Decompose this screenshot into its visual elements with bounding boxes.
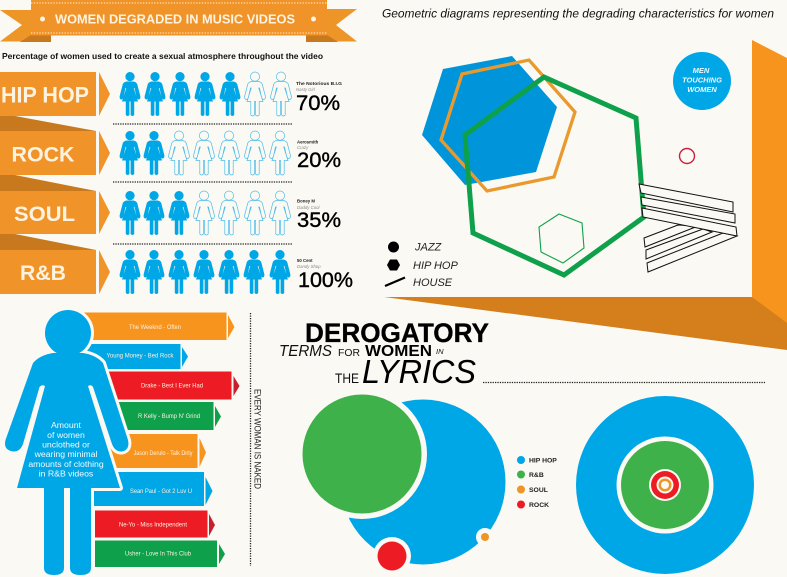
banner: sean paul bbox=[85, 472, 212, 506]
label: hip hop bbox=[0, 72, 110, 116]
banner: the weeknd bbox=[83, 312, 234, 340]
stat: hip hop 70% bbox=[296, 81, 343, 115]
heading: banner title: WOMEN DEGRADED IN MUSIC VIDEOS bbox=[55, 12, 295, 26]
heading: derogatory terms for women in the lyrics: LYRICS bbox=[362, 353, 476, 390]
label: r&b: R&B bbox=[20, 262, 66, 285]
diagram: geometric hexagons bbox=[422, 56, 737, 275]
heading: derogatory terms for women in the lyrics: THE bbox=[335, 371, 359, 386]
stat: soul 35%: Boney M bbox=[297, 198, 315, 204]
heading: derogatory terms for women in the lyrics: IN bbox=[436, 347, 444, 356]
banner: r kelly: R Kelly - Bump N' Grind bbox=[138, 414, 200, 420]
banner: the weeknd: The Weeknd - Often bbox=[129, 325, 181, 331]
panel: genre arrows bbox=[0, 72, 110, 294]
stat: soul 35% bbox=[297, 198, 341, 232]
stat: soul 35%: Daddy Cool bbox=[297, 205, 320, 210]
banner: jason derulo: Jason Derulo - Talk Dirty bbox=[134, 451, 192, 457]
legend: genres bbox=[517, 456, 557, 509]
banner: young money: Young Money - Bed Rock bbox=[106, 354, 174, 360]
shape: small red circle bbox=[680, 148, 694, 164]
label: every woman is naked: EVERY WOMAN IS NAKED bbox=[252, 389, 262, 489]
shape: solid blue hexagon bbox=[422, 56, 557, 185]
legend: shapes: HIP HOP bbox=[413, 260, 458, 272]
legend: genres: ROCK bbox=[529, 502, 549, 509]
banner: r kelly bbox=[110, 402, 221, 430]
banner: sean paul: Sean Paul - Got 2 Luv U bbox=[130, 489, 192, 495]
pictogram: rock 20% bbox=[120, 131, 290, 175]
chart: concentric circles bbox=[576, 396, 754, 574]
figure: large woman bbox=[5, 310, 128, 575]
shape: small green hexagon bbox=[539, 214, 584, 263]
banner: main title ribbon bbox=[0, 0, 357, 42]
banner: drake bbox=[105, 372, 240, 400]
text: figure caption: amounts of clothing bbox=[28, 459, 104, 469]
legend: shapes: HOUSE bbox=[413, 277, 453, 289]
shape: orange hexagon bbox=[441, 60, 575, 191]
stat: rock 20%: Crazy bbox=[297, 145, 309, 150]
shape: black line stripes bbox=[639, 184, 737, 272]
callout: men touching women: WOMEN bbox=[687, 85, 717, 94]
label: rock bbox=[0, 131, 110, 175]
banner: young money bbox=[85, 344, 188, 369]
label: rock: ROCK bbox=[12, 144, 74, 166]
heading: derogatory terms for women in the lyrics: DEROGATORY bbox=[305, 318, 489, 348]
subtitle: percentage chart caption: Percentage of women used to create a sexual atmosphere throughout the video bbox=[2, 51, 323, 61]
banner: jason derulo bbox=[100, 434, 206, 468]
stat: r&b 100%: 50 Cent bbox=[297, 258, 313, 263]
banner: drake: Drake - Best I Ever Had bbox=[141, 384, 203, 390]
stat: r&b 100%: Dandy Shop bbox=[297, 264, 321, 269]
pictogram: r&b 100% bbox=[120, 250, 290, 294]
text: figure caption: Amount bbox=[51, 420, 82, 430]
banner: usher bbox=[95, 540, 225, 567]
callout: men touching women bbox=[673, 52, 731, 110]
stat: rock 20% bbox=[297, 140, 341, 172]
text: figure caption: of women bbox=[47, 430, 85, 440]
legend: shapes bbox=[385, 242, 458, 289]
stat: rock 20%: Aerosmith bbox=[297, 140, 319, 144]
shape: large green hexagon bbox=[465, 77, 644, 275]
text: figure caption: wearing minimal bbox=[34, 449, 97, 459]
text: figure caption: unclothed or bbox=[42, 440, 90, 450]
callout: men touching women: TOUCHING bbox=[682, 76, 722, 84]
legend: shapes: JAZZ bbox=[414, 242, 443, 254]
stat: r&b 100% bbox=[297, 258, 353, 292]
pictogram: hip hop 70% bbox=[120, 72, 291, 116]
frame: orange 3d corner bbox=[384, 40, 787, 350]
list: song banners bbox=[83, 312, 240, 567]
label: soul: SOUL bbox=[14, 203, 75, 226]
stat: rock 20%: 20% bbox=[297, 149, 341, 172]
stat: r&b 100%: 100% bbox=[298, 269, 353, 292]
label: hip hop: HIP HOP bbox=[1, 82, 89, 108]
stat: hip hop 70%: 70% bbox=[296, 92, 340, 115]
banner: ne-yo: Ne-Yo - Miss Independent bbox=[119, 522, 187, 528]
legend: genres: SOUL bbox=[529, 487, 548, 494]
legend: genres: R&B bbox=[529, 472, 544, 479]
banner: ne-yo bbox=[95, 510, 215, 538]
heading: geometric diagrams: Geometric diagrams representing the degrading characteristics for women bbox=[382, 6, 774, 20]
stat: soul 35%: 35% bbox=[297, 209, 341, 232]
heading: derogatory terms for women in the lyrics bbox=[279, 318, 489, 390]
stat: hip hop 70%: The Notorious B.I.G bbox=[296, 81, 343, 86]
label: r&b bbox=[0, 250, 110, 294]
heading: derogatory terms for women in the lyrics: TERMS bbox=[279, 343, 332, 360]
chart: overlapping circles bbox=[297, 389, 506, 575]
text: figure caption bbox=[28, 420, 104, 478]
heading: derogatory terms for women in the lyrics: FOR bbox=[338, 348, 360, 359]
heading: derogatory terms for women in the lyrics: WOMEN bbox=[365, 343, 432, 360]
pictogram: soul 35% bbox=[120, 191, 290, 235]
text: figure caption: in R&B videos bbox=[39, 468, 94, 478]
banner: usher: Usher - Love In This Club bbox=[125, 552, 192, 558]
callout: men touching women: MEN bbox=[693, 66, 710, 75]
stat: hip hop 70%: Nasty Girl bbox=[296, 87, 316, 92]
legend: genres: HIP HOP bbox=[529, 458, 557, 464]
label: soul bbox=[0, 191, 110, 234]
